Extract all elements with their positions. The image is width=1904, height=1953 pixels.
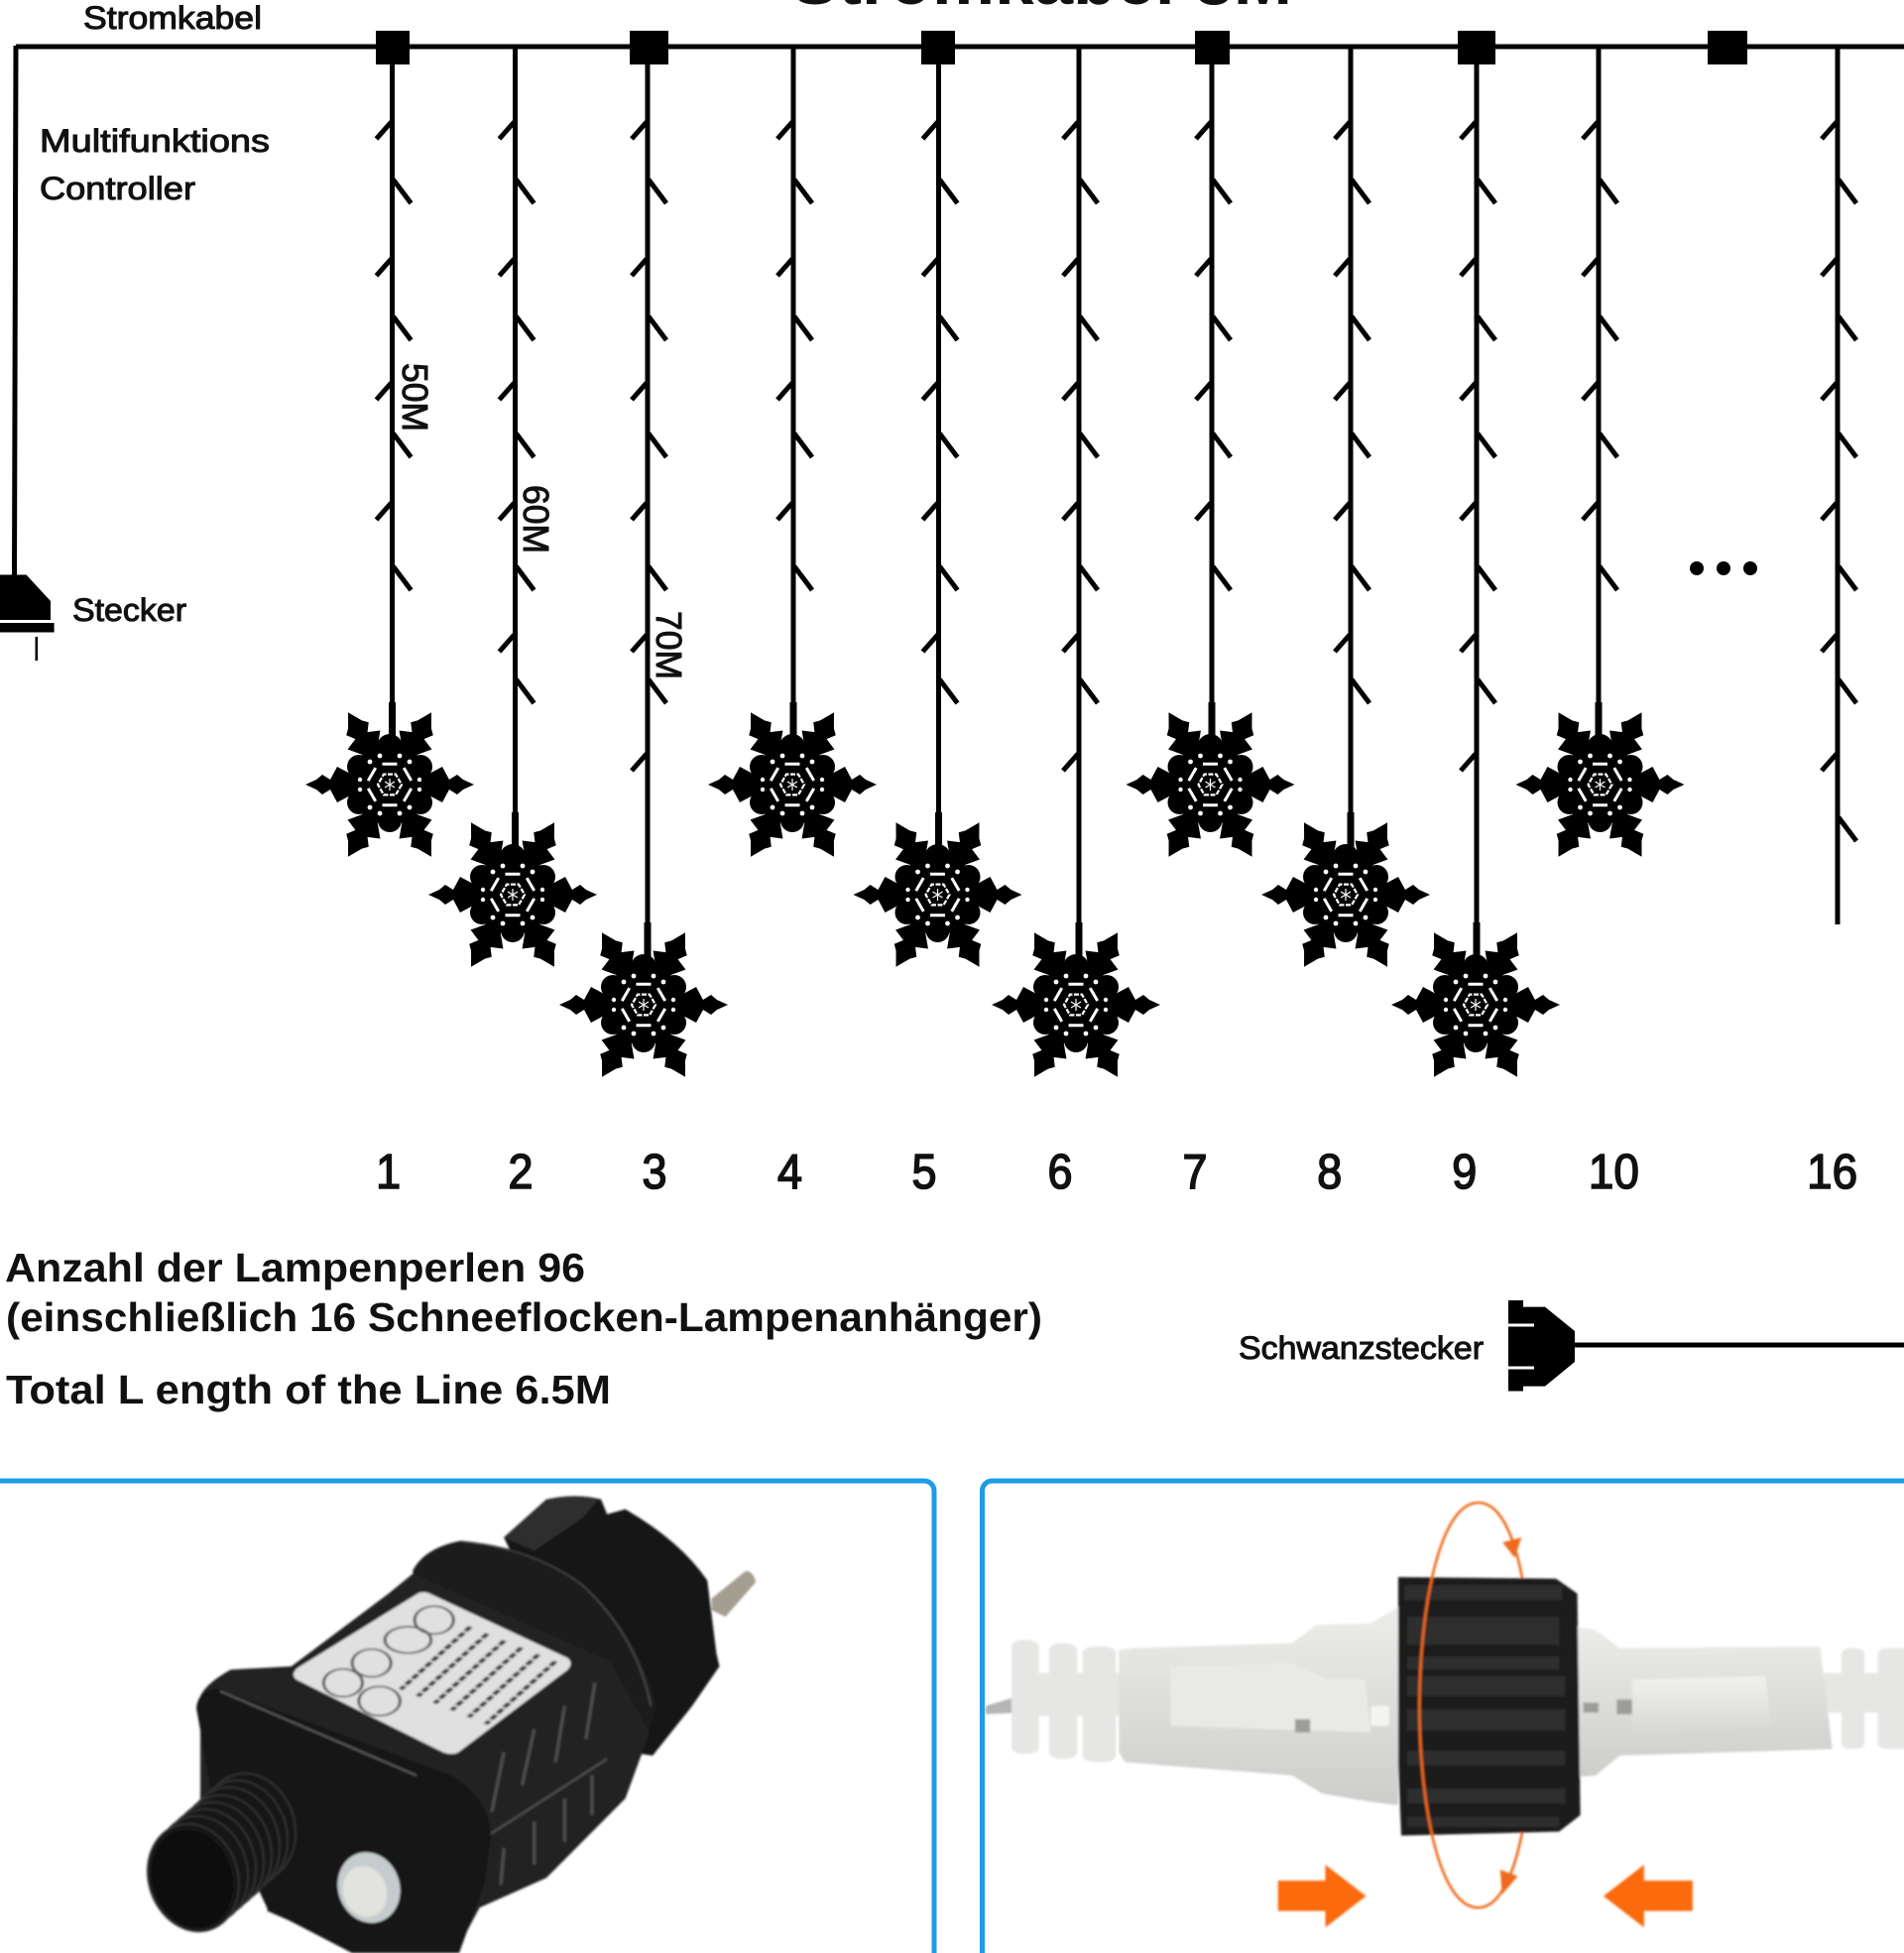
strand numbers: 1	[376, 1146, 401, 1199]
panel border right	[982, 1481, 1904, 1953]
icon: mains plug	[0, 575, 55, 661]
snowflake 8	[1261, 813, 1430, 976]
panel border left	[0, 1481, 934, 1953]
strand 9	[1461, 46, 1495, 964]
strand 7	[1196, 46, 1231, 744]
specification text: (einschließlich 16 Schneeflocken-Lampenanhänger)	[6, 1294, 1042, 1340]
length label 60M: 60M	[516, 485, 556, 553]
strand 10	[1583, 46, 1617, 744]
snowflake 6	[992, 923, 1160, 1086]
connector illustration	[986, 1503, 1904, 1927]
snowflake 7	[1127, 703, 1295, 866]
strand numbers	[376, 1146, 1857, 1199]
label: Stromkabel: Stromkabel	[83, 0, 262, 36]
snowflake 3	[559, 923, 728, 1086]
label: Multifunktions Controller: Controller	[40, 171, 195, 206]
label: Multifunktions Controller	[40, 123, 270, 206]
connector squares on the main cable	[376, 31, 1747, 64]
snowflake 5	[853, 813, 1021, 976]
specification text	[5, 1245, 1042, 1412]
ellipsis between strands	[1690, 561, 1757, 575]
snowflake 4	[708, 703, 877, 866]
snowflake 2	[428, 813, 597, 976]
strand numbers: 6	[1047, 1146, 1073, 1199]
strand 16	[1822, 46, 1856, 924]
specification text: Total L ength of the Line 6.5M	[6, 1367, 611, 1412]
strand numbers: 9	[1452, 1146, 1477, 1199]
strand 6	[1063, 46, 1098, 964]
snowflake 10	[1515, 703, 1684, 866]
strand numbers: 7	[1182, 1146, 1208, 1199]
strand 3	[632, 46, 666, 964]
label: Multifunktions Controller: Multifunktions	[40, 123, 270, 159]
icon: tail plug with cable	[1508, 1300, 1904, 1391]
power cable horizontal	[16, 44, 1904, 50]
strand numbers: 10	[1589, 1146, 1639, 1199]
wiring diagram	[0, 0, 1904, 1199]
strand numbers: 5	[912, 1146, 936, 1199]
snowflake 9	[1391, 923, 1560, 1086]
panel: power adapter photo	[0, 1481, 934, 1953]
panel: waterproof connector photo	[982, 1481, 1904, 1953]
power adapter illustration	[134, 1496, 756, 1953]
strand 4	[777, 46, 812, 744]
strand numbers: 2	[508, 1146, 534, 1199]
strand numbers: 3	[643, 1146, 666, 1199]
strand 2	[500, 46, 534, 854]
length label 70M: 70M	[649, 611, 689, 679]
specification text: Anzahl der Lampenperlen 96	[5, 1245, 585, 1290]
length label 50M: 50M	[395, 363, 435, 431]
label: Stecker: Stecker	[72, 592, 186, 628]
strand 1	[377, 46, 411, 744]
strand numbers: 8	[1317, 1146, 1342, 1199]
strand 5	[922, 46, 958, 854]
strand numbers: 16	[1807, 1146, 1857, 1199]
snowflake 1	[305, 703, 474, 866]
strand numbers: 4	[777, 1146, 802, 1199]
strand 8	[1335, 46, 1369, 854]
label: Schwanzstecker: Schwanzstecker	[1239, 1330, 1484, 1366]
controller cable vertical	[14, 46, 16, 577]
